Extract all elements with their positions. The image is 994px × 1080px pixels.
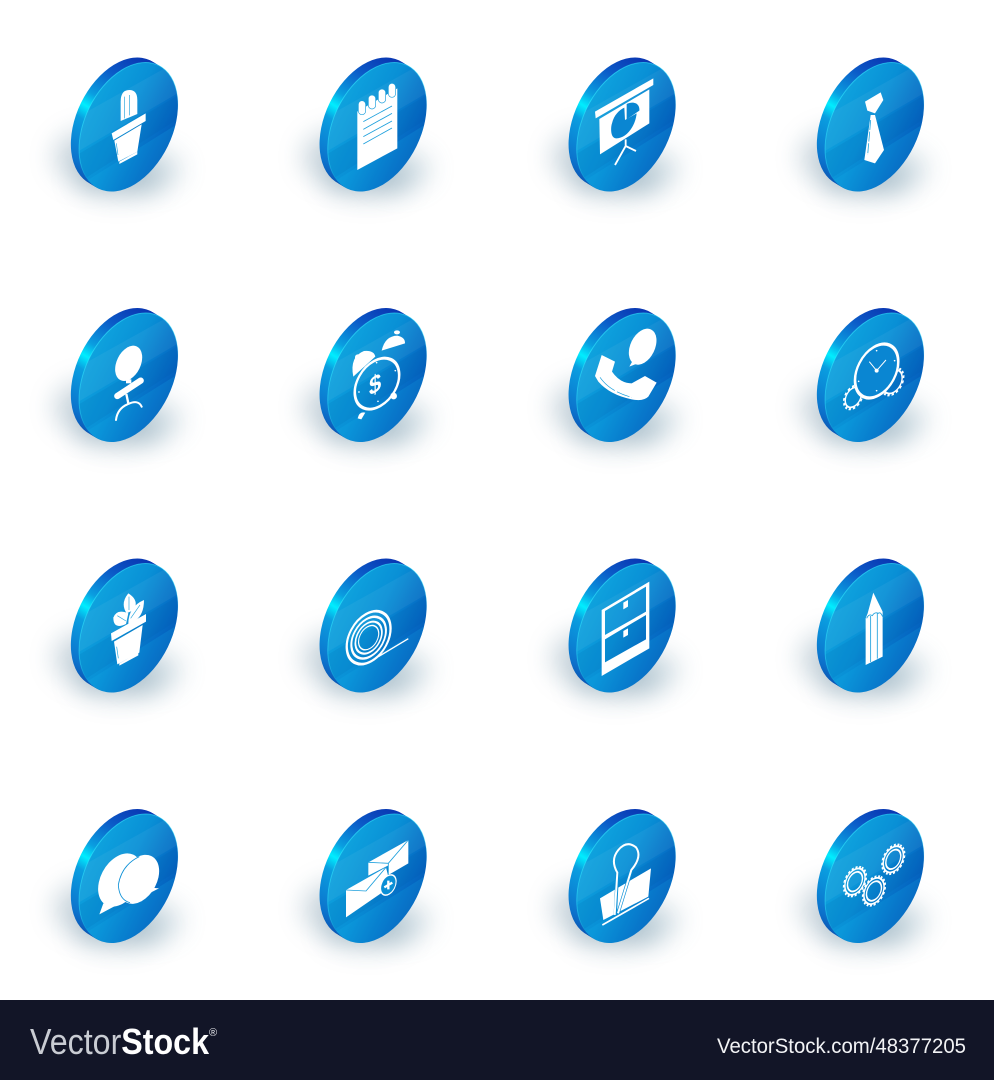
disc: drawer cabinet bbox=[552, 556, 686, 708]
icon: notepad bbox=[357, 83, 397, 170]
icon: clock with gears bbox=[840, 337, 908, 412]
icon: money alarm clock bbox=[346, 330, 408, 419]
disc: potted plant bbox=[54, 556, 188, 708]
disc: cactus bbox=[54, 55, 188, 207]
icon: phone with speech bubble bbox=[595, 324, 662, 400]
disc: office chair bbox=[54, 306, 188, 458]
disc: tape roll bbox=[303, 556, 437, 708]
disc: phone with speech bubble bbox=[552, 306, 686, 458]
disc: pencil bbox=[800, 556, 934, 708]
image id: VectorStock.com/48377205 bbox=[717, 1035, 966, 1058]
disc: necktie bbox=[800, 55, 934, 207]
icon: tape roll bbox=[338, 605, 408, 671]
icon: pencil bbox=[866, 593, 883, 665]
icon: drawer cabinet bbox=[602, 582, 649, 676]
disc: notepad bbox=[303, 55, 437, 207]
icon: binder clip bbox=[600, 844, 651, 925]
icon: cactus bbox=[112, 90, 146, 164]
icon: gears bbox=[839, 841, 909, 909]
disc: clock with gears bbox=[800, 306, 934, 458]
footer bar bbox=[0, 1000, 994, 1080]
logo: VectorStock: VectorStock bbox=[30, 1021, 210, 1062]
icon: potted plant bbox=[111, 593, 146, 666]
registered mark: ® bbox=[209, 1027, 217, 1039]
disc: binder clip bbox=[552, 806, 686, 958]
icon: necktie bbox=[864, 92, 884, 163]
disc: speech bubbles bbox=[54, 806, 188, 958]
icon: envelopes bbox=[346, 840, 408, 917]
disc: presentation board bbox=[552, 55, 686, 207]
disc: money alarm clock bbox=[303, 306, 437, 458]
icon: speech bubbles bbox=[89, 847, 167, 914]
icon: office chair bbox=[110, 341, 148, 420]
disc: envelopes bbox=[303, 806, 437, 958]
icon: money alarm clock: $ bbox=[369, 367, 381, 402]
disc: gears bbox=[800, 806, 934, 958]
icon: presentation board bbox=[595, 78, 653, 165]
